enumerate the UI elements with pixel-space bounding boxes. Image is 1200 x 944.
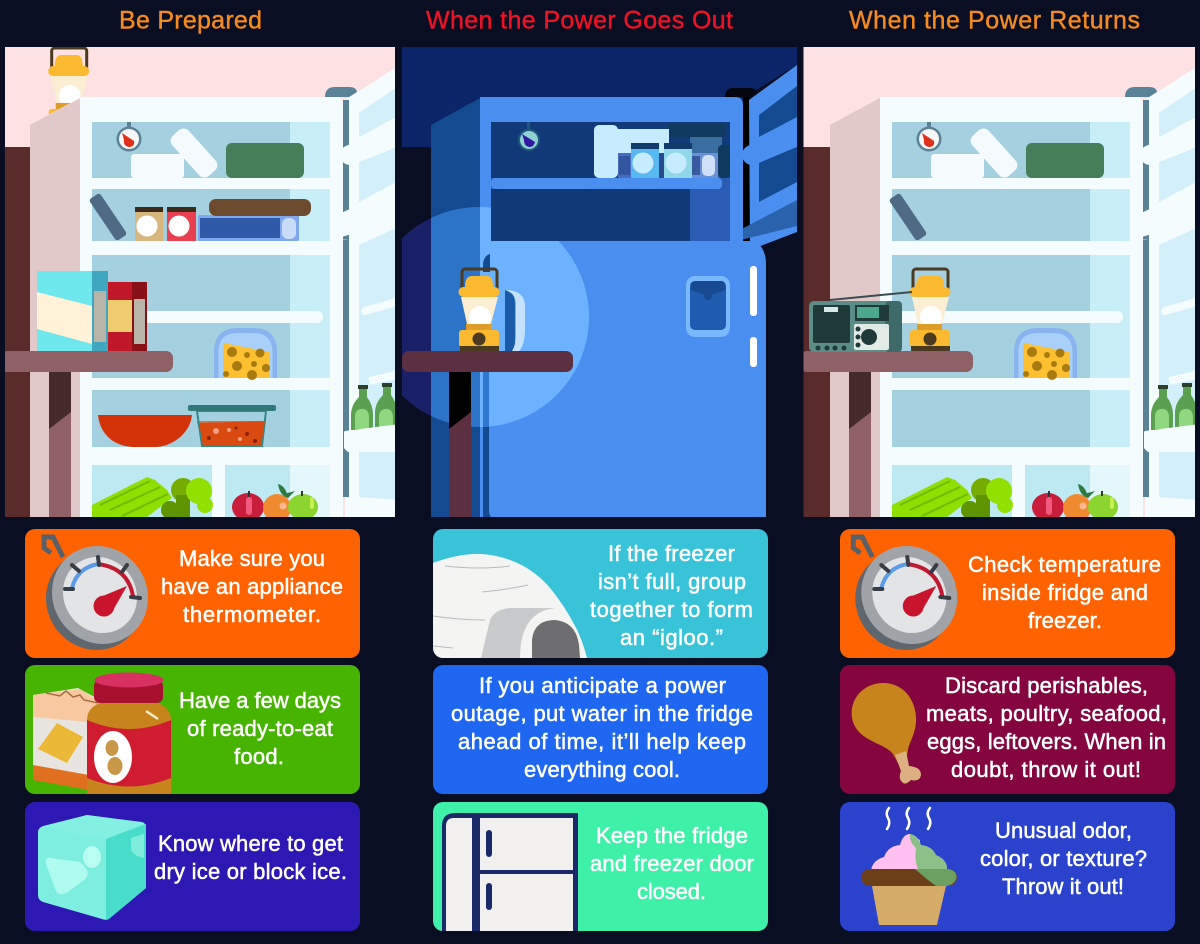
jars and containers on second shelf xyxy=(135,199,311,241)
text: keep closed: closed. xyxy=(637,879,706,904)
panel: restored fridge xyxy=(800,47,1200,522)
icon: crackers and peanut butter xyxy=(33,672,171,794)
door handle strips xyxy=(750,266,757,367)
freezer compartment xyxy=(491,122,730,241)
fridge side xyxy=(431,98,480,517)
card: check temperature tip xyxy=(836,527,1175,669)
text: keep closed: and freezer door xyxy=(590,851,754,876)
text: water tip xyxy=(451,673,753,782)
card: discard perishables tip xyxy=(840,665,1175,794)
text: ready-to-eat: of ready-to-eat xyxy=(187,716,333,741)
heading: When the Power Goes Out: When the Power Goes Out xyxy=(426,6,733,34)
text: make sure: have an appliance xyxy=(161,574,343,599)
card: igloo tip xyxy=(433,529,768,658)
text: water tip: everything cool. xyxy=(524,757,680,782)
text: check temperature: Check temperature xyxy=(968,552,1161,577)
text: unusual odor: Throw it out! xyxy=(1002,874,1124,899)
text: check temperature: freezer. xyxy=(1028,608,1102,633)
text: discard: eggs, leftovers. When in xyxy=(927,729,1166,754)
text: water tip: ahead of time, it’ll help keep xyxy=(458,729,746,754)
text: keep closed: Keep the fridge xyxy=(596,823,748,848)
lantern stored on top of fridge xyxy=(48,47,90,114)
open door xyxy=(725,65,797,252)
emergency radio xyxy=(809,292,912,352)
icon: closed fridge xyxy=(442,813,578,931)
icon: appliance thermometer xyxy=(27,527,167,669)
text: igloo: together to form xyxy=(590,597,753,622)
lantern on counter xyxy=(458,269,500,351)
text: ready-to-eat: Have a few days xyxy=(179,688,341,713)
text: discard: meats, poultry, seafood, xyxy=(926,701,1167,726)
fridge body and front door xyxy=(480,97,766,517)
text: dry ice: Know where to get xyxy=(158,831,343,856)
card: thermometer tip xyxy=(25,527,360,669)
text: ready-to-eat: food. xyxy=(234,744,284,769)
food boxes on counter xyxy=(37,271,147,351)
fridge door handle by lantern xyxy=(505,290,525,351)
panel: stocked open fridge xyxy=(0,47,400,522)
icon: chicken drumstick xyxy=(852,683,921,784)
panel: dark fridge during outage xyxy=(369,47,797,517)
food grouped together in freezer xyxy=(594,123,730,178)
text: discard xyxy=(926,673,1167,782)
bowl of red food xyxy=(98,415,192,447)
text: water tip: If you anticipate a power xyxy=(479,673,726,698)
card: unusual odor tip xyxy=(840,802,1175,931)
text: check temperature: inside fridge and xyxy=(982,580,1148,605)
card: dry ice tip xyxy=(25,802,360,931)
text: water tip: outage, put water in the fridge xyxy=(451,701,753,726)
card: keep doors closed tip xyxy=(433,802,768,931)
text: check temperature xyxy=(968,552,1161,633)
text: discard: doubt, throw it out! xyxy=(951,757,1141,782)
lantern xyxy=(910,269,950,351)
card: ready-to-eat food tip xyxy=(25,665,360,794)
text: make sure: Make sure you xyxy=(179,546,325,571)
text: make sure: thermometer. xyxy=(183,602,321,627)
heading: Be Prepared: Be Prepared xyxy=(119,6,262,34)
heading: When the Power Returns: When the Power Returns xyxy=(849,6,1140,34)
icon: igloo xyxy=(433,554,587,658)
icon: spoiled cupcake xyxy=(861,808,957,925)
icon: appliance thermometer xyxy=(836,527,976,669)
leftovers container xyxy=(188,405,276,447)
text: dry ice: dry ice or block ice. xyxy=(154,859,347,884)
text: keep closed xyxy=(590,823,754,904)
water dispenser xyxy=(686,276,730,337)
text: igloo xyxy=(590,541,753,650)
text: ready-to-eat xyxy=(179,688,341,769)
text: igloo: isn’t full, group xyxy=(598,569,746,594)
icon: ice block xyxy=(38,815,146,920)
text: unusual odor: Unusual odor, xyxy=(995,818,1132,843)
text: unusual odor xyxy=(980,818,1147,899)
text: discard: Discard perishables, xyxy=(945,673,1148,698)
counter table xyxy=(402,351,573,517)
text: igloo: an “igloo.” xyxy=(620,625,723,650)
text: igloo: If the freezer xyxy=(608,541,735,566)
card: water in fridge tip xyxy=(433,665,768,794)
text: make sure xyxy=(161,546,343,627)
dark kitchen background xyxy=(402,47,797,416)
text: dry ice xyxy=(154,831,347,884)
text: unusual odor: color, or texture? xyxy=(980,846,1147,871)
